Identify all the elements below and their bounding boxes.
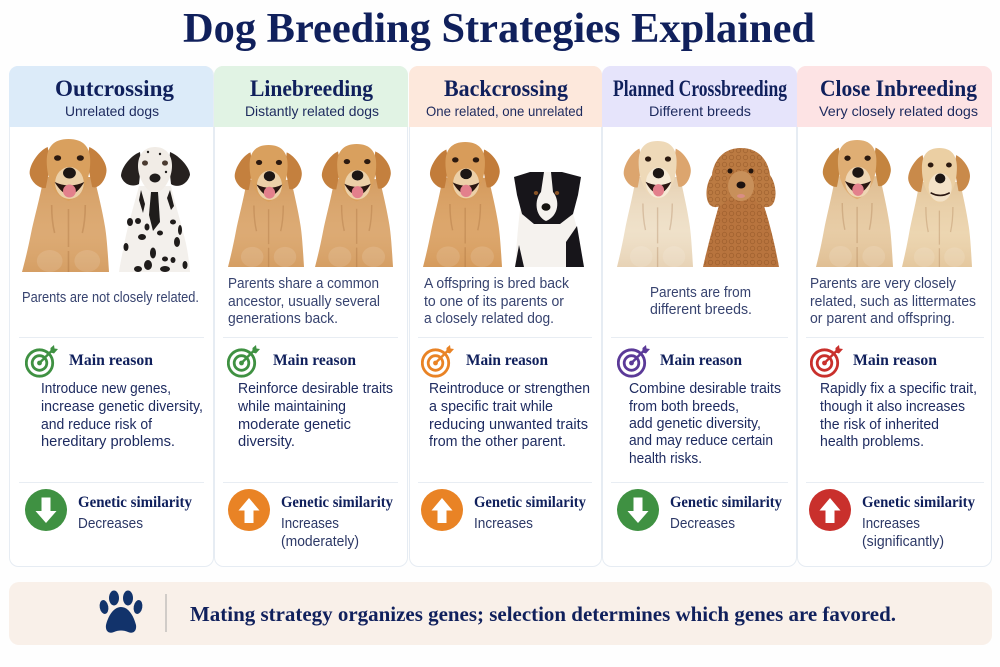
main reason text: hereditary problems. — [41, 434, 175, 450]
main reason text — [629, 381, 781, 467]
description — [228, 276, 380, 327]
description: Parents are not closely related. — [22, 290, 199, 306]
title: Dog Breeding Strategies Explained — [183, 6, 815, 52]
main reason text: diversity. — [238, 434, 295, 450]
genetic similarity — [862, 494, 975, 550]
description: related, such as littermates — [810, 294, 976, 310]
genetic similarity: (significantly) — [862, 534, 944, 550]
header: backcrossing: One related, one unrelated — [426, 103, 583, 119]
genetic similarity: Genetic similarity — [862, 494, 975, 511]
description: to one of its parents or — [424, 294, 564, 310]
panel: planned crossbreeding — [602, 66, 797, 566]
icon: arrow down — [617, 489, 659, 531]
main reason text: Reinforce desirable traits — [238, 381, 393, 397]
description — [650, 285, 752, 318]
description: Parents share a common — [228, 276, 379, 292]
main reason heading: Main reason — [69, 352, 153, 369]
genetic similarity: (moderately) — [281, 534, 359, 550]
description: A offspring is bred back — [424, 276, 570, 292]
main reason text: Combine desirable traits — [629, 381, 781, 397]
genetic similarity — [281, 494, 393, 550]
genetic similarity: Genetic similarity — [281, 494, 393, 511]
description — [424, 276, 570, 327]
icon: arrow down — [25, 489, 67, 531]
icon: arrow up — [421, 489, 463, 531]
main reason text — [429, 381, 590, 450]
main reason text: the risk of inherited — [820, 417, 939, 433]
header: close inbreeding: Close Inbreeding — [820, 76, 977, 101]
genetic similarity: Genetic similarity — [474, 494, 586, 511]
footer message: Mating strategy organizes genes; selection determines which genes are favored. — [190, 602, 896, 626]
header: linebreeding — [214, 66, 408, 127]
main reason text: though it also increases — [820, 399, 965, 415]
header: planned crossbreeding — [602, 66, 797, 127]
genetic similarity — [78, 494, 192, 532]
description: ancestor, usually several — [228, 294, 380, 310]
icon: target — [26, 345, 58, 376]
header: outcrossing: Unrelated dogs — [65, 103, 159, 119]
description: Parents are from — [650, 285, 751, 301]
main reason text: and may reduce certain — [629, 433, 773, 449]
genetic similarity: Increases — [281, 516, 339, 532]
description — [810, 276, 976, 327]
genetic similarity — [474, 494, 586, 532]
description: generations back. — [228, 311, 338, 327]
main reason text: from the other parent. — [429, 434, 566, 450]
main reason text: reducing unwanted traits — [429, 417, 588, 433]
main reason heading: Main reason — [466, 352, 548, 369]
main reason text: Reintroduce or strengthen — [429, 381, 590, 397]
panel: backcrossing — [409, 66, 602, 566]
main reason heading: Main reason — [853, 352, 937, 369]
main reason text: increase genetic diversity, — [41, 399, 203, 415]
illustration: golden retriever and border collie — [423, 142, 584, 267]
header: backcrossing: Backcrossing — [444, 76, 568, 101]
description: a closely related dog. — [424, 311, 554, 327]
main reason text — [41, 381, 203, 450]
main reason text: health risks. — [629, 451, 702, 467]
genetic similarity: Genetic similarity — [670, 494, 782, 511]
main reason text: add genetic diversity, — [629, 416, 761, 432]
panel: outcrossing — [9, 66, 214, 566]
description: or parent and offspring. — [810, 311, 955, 327]
main reason text: Introduce new genes, — [41, 381, 171, 397]
genetic similarity: Decreases — [670, 516, 735, 532]
header: planned crossbreeding: Different breeds — [649, 103, 751, 119]
main reason text — [237, 381, 393, 450]
main reason text: moderate genetic — [238, 417, 351, 433]
description: Parents are very closely — [810, 276, 957, 292]
header: close inbreeding: Very closely related dogs — [819, 103, 978, 119]
main reason text: health problems. — [820, 434, 924, 450]
icon: target — [811, 345, 843, 376]
main reason heading: Main reason — [660, 352, 742, 369]
genetic similarity: Increases — [474, 516, 533, 532]
main reason text: from both breeds, — [629, 399, 739, 415]
header: backcrossing — [409, 66, 602, 127]
illustration: labrador and doodle — [617, 141, 779, 267]
illustration: golden retriever and labrador — [816, 140, 972, 267]
header: close inbreeding — [797, 66, 992, 127]
main reason text: and reduce risk of — [41, 417, 153, 433]
header: outcrossing — [9, 66, 213, 127]
header: linebreeding: Linebreeding — [250, 76, 373, 101]
panel: linebreeding — [214, 66, 408, 566]
description: different breeds. — [650, 302, 752, 318]
main reason text: while maintaining — [237, 399, 346, 415]
genetic similarity: Decreases — [78, 516, 143, 532]
header: linebreeding: Distantly related dogs — [245, 103, 379, 119]
main reason text: Rapidly fix a specific trait, — [820, 381, 977, 397]
icon: target — [618, 345, 650, 376]
panel: close inbreeding — [797, 66, 992, 566]
main reason heading: Main reason — [273, 352, 356, 369]
illustration: two golden retrievers — [228, 144, 393, 267]
genetic similarity — [670, 494, 782, 532]
header: outcrossing: Outcrossing — [55, 76, 174, 101]
icon: target — [228, 345, 260, 376]
header: planned crossbreeding: Planned Crossbreeding — [613, 76, 787, 101]
icon: paw — [99, 590, 143, 633]
footer banner — [9, 582, 992, 645]
main reason text: a specific trait while — [429, 399, 553, 415]
genetic similarity: Genetic similarity — [78, 494, 192, 511]
main reason text — [820, 381, 977, 450]
icon: arrow up — [809, 489, 851, 531]
icon: target — [422, 345, 454, 376]
genetic similarity: Increases — [862, 516, 920, 532]
illustration: golden retriever and dalmatian — [22, 139, 190, 272]
icon: arrow up — [228, 489, 270, 531]
